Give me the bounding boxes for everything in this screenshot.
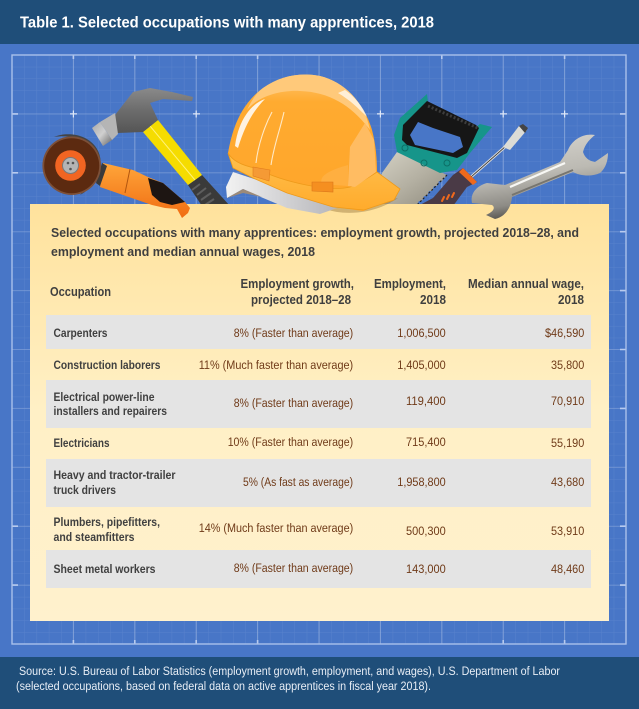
column headers: Employment growth, [240, 277, 354, 291]
source note: (selected occupations, based on federal data on active apprentices in fiscal year 2018). [16, 679, 431, 693]
row: Plumbers, pipefitters, and steamfitters: 500,300 [406, 524, 446, 538]
column headers: 2018 [420, 293, 446, 307]
panel: table background [30, 204, 609, 621]
row: Construction laborers: 1,405,000 [397, 358, 446, 372]
row: Plumbers, pipefitters, and steamfitters: 14% (Much faster than average) [199, 521, 353, 535]
row: Plumbers, pipefitters, and steamfitters: and steamfitters [54, 530, 135, 544]
column headers [50, 277, 584, 307]
row: Electrical power-line installers and repairers: 119,400 [406, 394, 446, 408]
icon: hand saw [368, 94, 492, 206]
icon: screwdriver [418, 124, 528, 206]
row: Sheet metal workers: 48,460 [551, 562, 584, 576]
row: Electricians: Electricians [54, 436, 110, 450]
row: Electrical power-line installers and repairers: 8% (Faster than average) [234, 396, 353, 410]
row: Carpenters: $46,590 [545, 326, 584, 340]
column headers: projected 2018–28 [251, 293, 351, 307]
table heading [51, 225, 579, 259]
row: Sheet metal workers: 8% (Faster than average) [234, 561, 353, 575]
table heading: Selected occupations with many apprentices: employment growth, projected 2018–28, and [51, 225, 579, 240]
row: Carpenters: 1,006,500 [397, 326, 446, 340]
row: Electrical power-line installers and repairers: installers and repairers [54, 404, 167, 418]
header bar [0, 0, 639, 44]
icon: hard hat [226, 74, 400, 214]
column headers: 2018 [558, 293, 584, 307]
row: Electricians: 55,190 [551, 436, 584, 450]
row: Carpenters: 8% (Faster than average) [234, 326, 353, 340]
row: Electricians: 715,400 [406, 435, 446, 449]
row: Carpenters: Carpenters [54, 326, 108, 340]
row: Plumbers, pipefitters, and steamfitters: Plumbers, pipefitters, [54, 515, 160, 529]
table [46, 225, 591, 588]
row: Heavy and tractor-trailer truck drivers: 1,958,800 [397, 475, 446, 489]
row: Carpenters [46, 315, 591, 349]
source note [16, 664, 560, 693]
row: Electricians: 10% (Faster than average) [228, 435, 353, 449]
row: Electrical power-line installers and repairers [46, 380, 591, 428]
row: Electricians [54, 435, 584, 450]
row: Construction laborers [54, 358, 584, 372]
row: Plumbers, pipefitters, and steamfitters: 53,910 [551, 524, 584, 538]
row: Construction laborers: Construction laborers [54, 358, 161, 372]
icon: hammer [92, 88, 230, 206]
title: Table 1. Selected occupations with many apprentices, 2018 [20, 14, 434, 32]
row: Heavy and tractor-trailer truck drivers [46, 459, 591, 507]
column headers: Employment, [374, 277, 446, 291]
column headers: Median annual wage, [468, 277, 584, 291]
row: Sheet metal workers: 143,000 [406, 562, 446, 576]
footer bar [0, 657, 639, 709]
row: Heavy and tractor-trailer truck drivers: truck drivers [54, 483, 116, 497]
icon: angle grinder [42, 134, 190, 218]
icon: wrench [472, 135, 608, 219]
row: Electrical power-line installers and repairers: 70,910 [551, 394, 584, 408]
row: Construction laborers: 11% (Much faster than average) [199, 358, 353, 372]
table heading: employment and median annual wages, 2018 [51, 244, 315, 259]
row: Plumbers, pipefitters, and steamfitters [54, 515, 584, 544]
source note: Source: U.S. Bureau of Labor Statistics (employment growth, employment, and wages), U.S. Department of Labor [19, 664, 560, 678]
row: Heavy and tractor-trailer truck drivers: 5% (As fast as average) [243, 475, 353, 489]
row: Sheet metal workers: Sheet metal workers [54, 562, 156, 576]
row: Heavy and tractor-trailer truck drivers: Heavy and tractor-trailer [54, 468, 176, 482]
row: Heavy and tractor-trailer truck drivers: 43,680 [551, 475, 584, 489]
row: Construction laborers: 35,800 [551, 358, 584, 372]
row: Electrical power-line installers and repairers: Electrical power-line [54, 390, 155, 404]
column headers: Occupation [50, 285, 111, 299]
row: Sheet metal workers [46, 550, 591, 588]
